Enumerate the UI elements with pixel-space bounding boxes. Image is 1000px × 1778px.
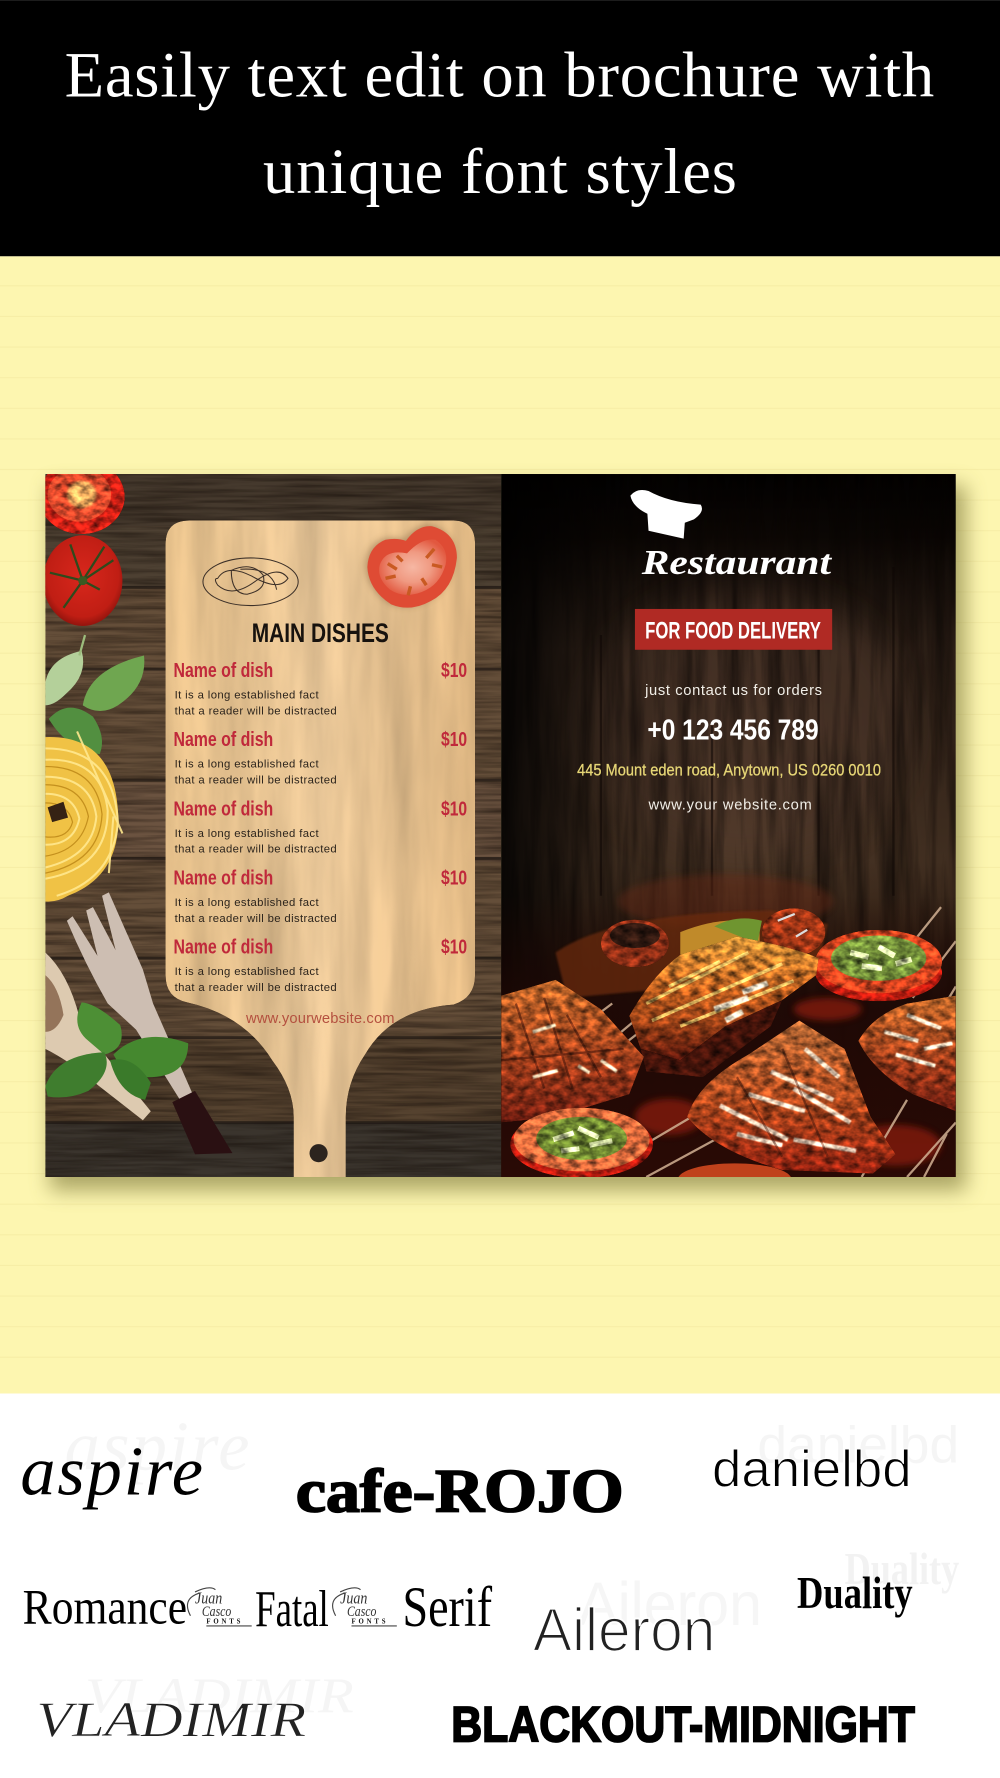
menu item 3: $10	[441, 798, 467, 820]
menu item 5: $10	[441, 937, 467, 959]
icon: chef hat	[630, 490, 702, 539]
menu item 2: Name of dish	[173, 729, 273, 751]
icon: basil sprig	[45, 1002, 188, 1100]
restaurant logotype: Restaurant	[641, 543, 833, 582]
font sample: aileron	[533, 1570, 762, 1664]
icon: knot logo	[203, 558, 298, 606]
font sample: duality: Duality	[845, 1544, 959, 1594]
website link: www.yourwebsite.com	[245, 1011, 395, 1027]
font sample: aileron: Aileron	[578, 1570, 762, 1638]
font sample: romance fatal serif: Serif	[402, 1576, 492, 1639]
delivery badge: FOR FOOD DELIVERY	[645, 617, 821, 644]
font sample: duality	[797, 1544, 959, 1618]
font sample: romance fatal serif: Juan	[195, 1588, 222, 1607]
menu item 1: that a reader will be distracted	[175, 705, 337, 717]
heading: main dishes: MAIN DISHES	[252, 617, 389, 648]
grilled food photo	[501, 874, 956, 1195]
font sample: vladimir: VLADIMIR	[36, 1692, 306, 1747]
title line 2: unique font styles	[263, 135, 737, 207]
menu item 1: $10	[441, 660, 467, 682]
menu item 1: Name of dish	[173, 660, 273, 682]
phone number: +0 123 456 789	[647, 714, 819, 746]
wood background	[45, 474, 501, 1177]
icon: tomato slice	[365, 525, 457, 608]
icon: whole tomato	[43, 535, 122, 626]
menu item 4: that a reader will be distracted	[175, 913, 337, 925]
font sample: aspire: aspire	[65, 1407, 249, 1485]
menu item 4: $10	[441, 867, 467, 889]
font sample: aspire	[20, 1407, 249, 1510]
title line 1: Easily text edit on brochure with	[65, 38, 934, 110]
menu item 2: $10	[441, 729, 467, 751]
font sample: romance fatal serif: Romance	[23, 1580, 187, 1635]
menu item 4: Name of dish	[173, 867, 273, 889]
steak bottom	[687, 1021, 896, 1174]
panel: left menu page	[39, 459, 501, 1177]
menu item 3	[173, 798, 467, 856]
menu item 2: It is a long established fact	[175, 759, 319, 771]
panel: font samples	[0, 1394, 1000, 1778]
tomato bottom edge	[678, 1163, 791, 1177]
menu item 2	[173, 729, 467, 787]
font sample: aspire: aspire	[20, 1432, 203, 1510]
grill bars	[590, 907, 956, 1177]
menu item 5: It is a long established fact	[175, 966, 319, 978]
font sample: aileron: Aileron	[533, 1596, 715, 1664]
grilled pepper	[762, 908, 825, 956]
menu item 5: Name of dish	[173, 937, 273, 959]
icon: pasta nest	[45, 731, 122, 902]
font sample: romance fatal serif: FONTS	[351, 1619, 386, 1626]
menu item 3: It is a long established fact	[175, 828, 319, 840]
menu item 3: Name of dish	[173, 798, 273, 820]
menu item 4: It is a long established fact	[175, 897, 319, 909]
menu item 3: that a reader will be distracted	[175, 844, 337, 856]
icon: wooden spoon	[45, 952, 151, 1120]
icon: halved tomato	[45, 474, 125, 534]
font sample: romance fatal serif: Fatal	[255, 1581, 329, 1638]
font sample: vladimir	[36, 1668, 354, 1747]
yellow lined paper background	[0, 256, 1000, 1394]
font sample: blackout midnight: BLACKOUT-MIDNIGHT	[451, 1697, 915, 1753]
icon: basil leaves	[45, 635, 144, 754]
font sample: romance fatal serif	[23, 1576, 492, 1639]
menu item 5	[173, 937, 467, 994]
font sample: cafe-rojo: cafe-ROJO	[296, 1457, 624, 1525]
font sample: danielbd	[712, 1417, 959, 1499]
contact line: just contact us for orders	[644, 683, 822, 699]
stuffed tomato upper right	[815, 930, 942, 1001]
address: 445 Mount eden road, Anytown, US 0260 0010	[577, 761, 881, 780]
steak centre	[629, 937, 819, 1077]
font sample: romance fatal serif: Casco	[202, 1604, 231, 1620]
panel: cutting board	[166, 521, 475, 1177]
menu item 2: that a reader will be distracted	[175, 775, 337, 787]
panel: right delivery page	[501, 474, 956, 1195]
header band	[0, 0, 1000, 256]
grilled mushroom	[601, 920, 669, 967]
font sample: vladimir: VLADIMIR	[85, 1668, 354, 1723]
font sample: duality: Duality	[797, 1568, 913, 1618]
steak right	[858, 996, 956, 1111]
icon: wooden fork	[67, 892, 232, 1154]
font sample: romance fatal serif: Juan	[340, 1588, 367, 1607]
font sample: danielbd: danielbd	[712, 1441, 912, 1499]
menu item 1: It is a long established fact	[175, 690, 319, 702]
font sample: danielbd: danielbd	[757, 1417, 959, 1475]
hot coals	[635, 998, 941, 1166]
font sample: romance fatal serif: Casco	[347, 1604, 376, 1620]
menu item 5: that a reader will be distracted	[175, 982, 337, 994]
delivery badge	[635, 609, 832, 650]
menu item 1	[173, 660, 467, 717]
font sample: romance fatal serif: FONTS	[206, 1619, 241, 1626]
brochure drop shadow	[50, 485, 966, 1191]
steak left	[501, 980, 644, 1123]
dark wood background	[501, 474, 956, 1177]
menu item 4	[173, 867, 467, 925]
website: www.your website.com	[648, 798, 812, 814]
board handle hole	[310, 1144, 328, 1162]
stuffed tomato lower left	[510, 1108, 653, 1178]
